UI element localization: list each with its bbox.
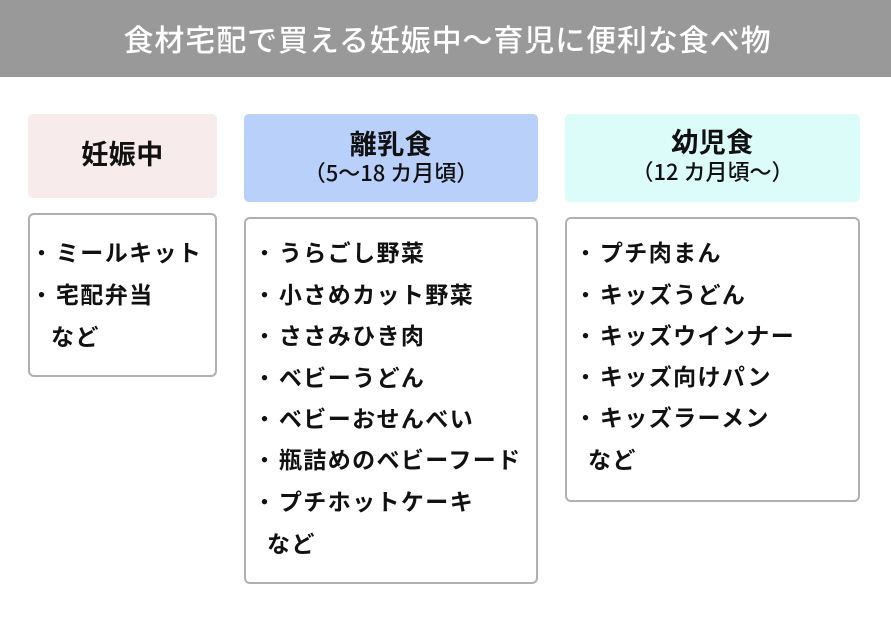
panel: weaning list <box>244 217 538 584</box>
panel: toddler food header <box>565 114 860 202</box>
title: 食材宅配で買える妊娠中～育児に便利な食べ物 <box>124 16 772 60</box>
list: weaning foods: ・ベビーおせんべい <box>253 400 474 434</box>
list: pregnancy foods: ・宅配弁当 <box>30 276 154 310</box>
heading: weaning food: 離乳食 <box>350 123 432 162</box>
panel: weaning food header <box>244 114 538 202</box>
list: weaning foods: ・瓶詰めのベビーフード <box>253 441 522 475</box>
list: weaning foods: ・うらごし野菜 <box>253 234 425 268</box>
panel: pregnancy header <box>28 114 217 198</box>
list: weaning foods: など <box>267 525 316 559</box>
list: weaning foods <box>253 234 522 559</box>
list: weaning foods: ・小さめカット野菜 <box>253 276 474 310</box>
list: weaning foods: ・プチホットケーキ <box>253 483 474 517</box>
heading: toddler food: 幼児食 <box>671 121 754 160</box>
list: pregnancy foods <box>30 234 202 352</box>
panel: toddler list <box>565 217 860 502</box>
subheading: weaning age: （5～18 カ月頃） <box>304 156 478 188</box>
list: pregnancy foods: ・ミールキット <box>30 234 202 268</box>
list: toddler foods: ・キッズ向けパン <box>574 358 772 392</box>
list: toddler foods: ・プチ肉まん <box>574 234 722 268</box>
subheading: toddler age: （12 カ月頃～） <box>631 155 794 187</box>
list: toddler foods: ・キッズラーメン <box>574 399 770 433</box>
list: toddler foods <box>574 234 795 475</box>
title banner <box>0 0 891 77</box>
list: pregnancy foods: など <box>51 318 100 352</box>
heading: pregnancy: 妊娠中 <box>81 133 164 172</box>
list: toddler foods: など <box>588 441 637 475</box>
list: weaning foods: ・ベビーうどん <box>253 359 425 393</box>
panel: pregnancy list <box>28 213 217 377</box>
list: toddler foods: ・キッズウインナー <box>574 317 795 351</box>
list: toddler foods: ・キッズうどん <box>574 276 746 310</box>
list: weaning foods: ・ささみひき肉 <box>253 317 425 351</box>
